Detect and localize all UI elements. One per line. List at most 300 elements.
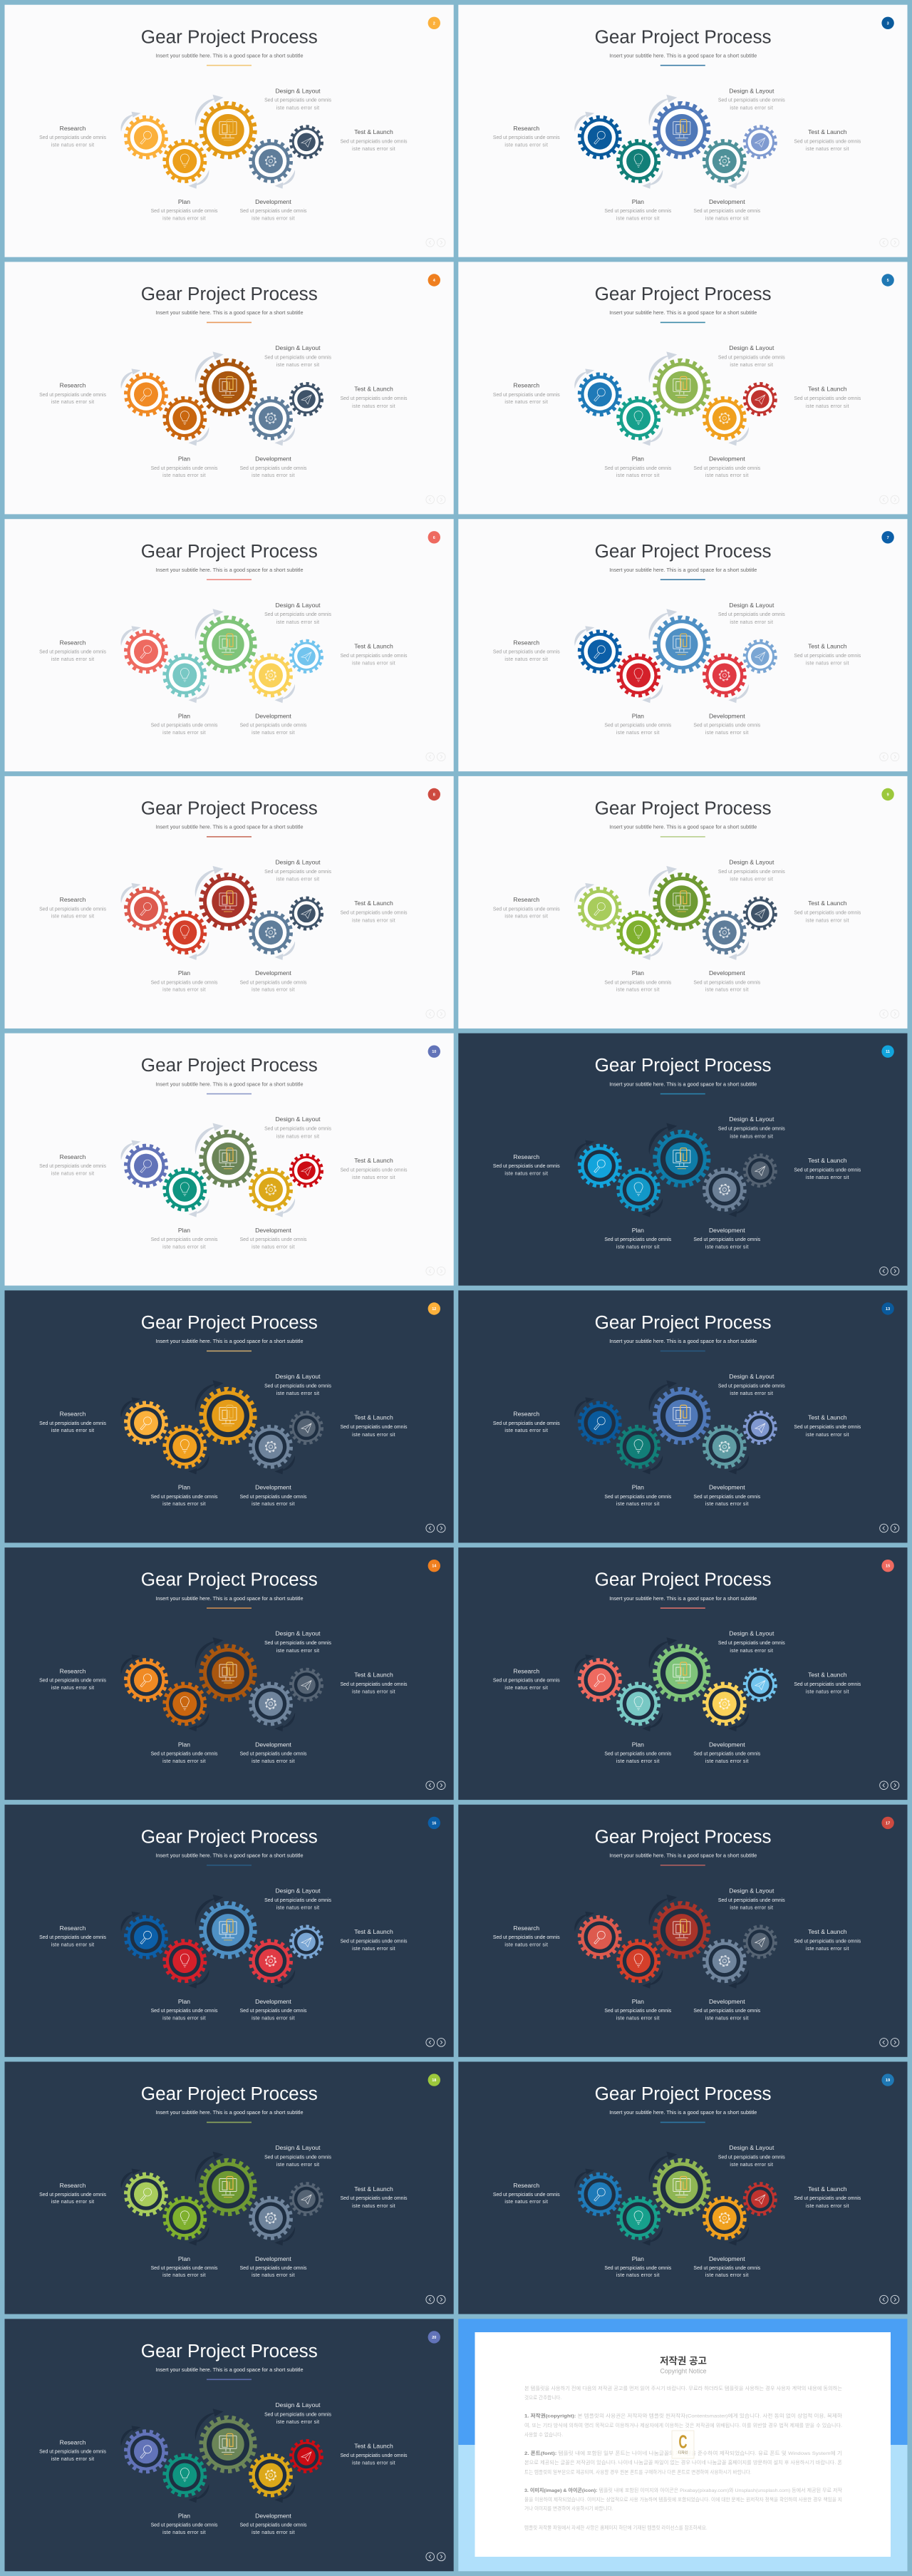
subtitle: Insert your subtitle here. This is a good space for a short subtitle [609, 2109, 757, 2116]
label: research: Sed ut perspiciatis unde omnis [493, 135, 560, 140]
gear: plan [165, 1941, 205, 1982]
title: Gear Project Process [595, 1569, 772, 1590]
gear: design [655, 1132, 708, 1185]
label: plan: Sed ut perspiciatis unde omnis [604, 1237, 672, 1242]
label: research: Research [513, 1925, 539, 1932]
gear: design [201, 1389, 255, 1443]
label: research: Research [513, 2182, 539, 2189]
title: Gear Project Process [141, 2083, 318, 2104]
title: Gear Project Process [595, 283, 772, 304]
label: test: iste natus error sit [806, 404, 849, 409]
label: development: Sed ut perspiciatis unde omnis [693, 209, 761, 214]
slide 9: light green [458, 776, 908, 1029]
nav buttons [880, 1524, 899, 1532]
gear: design [655, 361, 708, 414]
label: design: iste natus error sit [276, 1391, 319, 1396]
label: plan: Plan [632, 1741, 644, 1748]
arrows [120, 351, 295, 445]
label: test: Sed ut perspiciatis unde omnis [341, 1939, 408, 1944]
gear: design [201, 2160, 255, 2214]
gear: research [579, 374, 620, 415]
slide 20: dark indigo [4, 2319, 454, 2571]
gear: design [655, 103, 708, 157]
label: plan: Sed ut perspiciatis unde omnis [151, 1495, 218, 1500]
nav buttons [426, 2552, 445, 2561]
label: development: Sed ut perspiciatis unde omnis [693, 2009, 761, 2014]
label: research: iste natus error sit [51, 143, 94, 148]
arrows [120, 95, 295, 189]
label: test: Sed ut perspiciatis unde omnis [341, 2453, 408, 2458]
label: development: Sed ut perspiciatis unde omnis [240, 2266, 307, 2271]
label: research: Sed ut perspiciatis unde omnis [39, 2193, 106, 2198]
label: plan: iste natus error sit [616, 216, 660, 221]
label: development: Development [709, 198, 745, 205]
label: plan: iste natus error sit [162, 988, 206, 993]
page badge: 13 [886, 1307, 890, 1312]
label: design: Sed ut perspiciatis unde omnis [264, 2155, 331, 2160]
label: development: iste natus error sit [252, 1245, 295, 1250]
label: test: iste natus error sit [806, 147, 849, 152]
label: development: Development [255, 2255, 291, 2262]
label: test: Test & Launch [808, 1928, 847, 1935]
gear: design [201, 2418, 255, 2471]
label: plan: Sed ut perspiciatis unde omnis [151, 1752, 218, 1757]
label: research: Sed ut perspiciatis unde omnis [493, 1679, 560, 1684]
subtitle: Insert your subtitle here. This is a good space for a short subtitle [155, 1853, 304, 1859]
page badge [428, 2331, 440, 2344]
label: test: Test & Launch [354, 1157, 393, 1164]
label: design: Sed ut perspiciatis unde omnis [264, 870, 331, 875]
label: plan: Sed ut perspiciatis unde omnis [151, 2266, 218, 2271]
label: research: Research [60, 1925, 86, 1932]
label: test: Test & Launch [808, 1157, 847, 1164]
gear: research [579, 1145, 620, 1186]
label: design: Design & Layout [275, 602, 321, 609]
label: research: iste natus error sit [51, 1428, 94, 1433]
label: development: Sed ut perspiciatis unde omnis [240, 980, 307, 985]
label: test: Test & Launch [354, 643, 393, 650]
label: design: Sed ut perspiciatis unde omnis [264, 98, 331, 103]
label: plan: Plan [632, 1998, 644, 2005]
title rule [660, 1865, 705, 1866]
gear: development [704, 1426, 745, 1467]
label: development: Development [255, 1741, 291, 1748]
label: plan: iste natus error sit [616, 988, 660, 993]
nav buttons [426, 2295, 445, 2304]
label: development: Development [255, 1227, 291, 1234]
label: research: Sed ut perspiciatis unde omnis [39, 393, 106, 398]
arrows [120, 2151, 295, 2245]
label: development: Sed ut perspiciatis unde omnis [240, 466, 307, 471]
label: plan: Plan [632, 969, 644, 977]
label: plan: Plan [178, 1998, 190, 2005]
title rule [660, 322, 705, 323]
label: plan: iste natus error sit [616, 2273, 660, 2278]
gear: plan [618, 1169, 659, 1210]
copyright logo [672, 2431, 694, 2458]
gear: development [251, 912, 291, 953]
label: design: Design & Layout [729, 1887, 774, 1894]
label: design: iste natus error sit [276, 1906, 319, 1911]
label: research: Research [513, 125, 539, 132]
label: design: iste natus error sit [276, 620, 319, 625]
label: design: Design & Layout [275, 2144, 321, 2151]
label: design: Design & Layout [729, 1116, 774, 1123]
gear: plan [618, 2198, 659, 2238]
label: design: iste natus error sit [730, 1391, 773, 1396]
gear: test [291, 1669, 322, 1701]
label: test: iste natus error sit [352, 1433, 395, 1438]
gear: design [655, 875, 708, 928]
label: test: Test & Launch [808, 1671, 847, 1678]
copyright paragraph: font: 2. 폰트(font): 템플릿 내에 포함된 일부 폰트는 나이네 나눔글꼴의 저작권을 준수하여 제작되었습니다. 유료 폰트 및 Windows System에 기 [524, 2450, 842, 2456]
label: plan: Plan [178, 198, 190, 205]
gear: test [291, 1926, 322, 1957]
page badge: 18 [432, 2078, 436, 2083]
nav buttons [426, 1010, 445, 1018]
label: plan: iste natus error sit [162, 216, 206, 221]
gear: test [291, 2183, 322, 2215]
arrows [120, 609, 295, 703]
title: Gear Project Process [595, 540, 772, 562]
label: design: Design & Layout [729, 602, 774, 609]
label: design: Design & Layout [729, 2144, 774, 2151]
slide 15: dark pastel [458, 1547, 908, 1800]
subtitle: Insert your subtitle here. This is a good space for a short subtitle [609, 1595, 757, 1602]
subtitle: Insert your subtitle here. This is a good space for a short subtitle [155, 1081, 304, 1087]
label: research: Research [513, 896, 539, 903]
label: research: Research [60, 1667, 86, 1674]
label: test: Test & Launch [354, 128, 393, 135]
page badge [881, 788, 894, 800]
label: test: Test & Launch [808, 2185, 847, 2193]
label: research: iste natus error sit [51, 915, 94, 919]
gear: design [201, 875, 255, 928]
gear: plan [165, 141, 205, 181]
label: plan: iste natus error sit [616, 731, 660, 736]
title: Gear Project Process [595, 798, 772, 819]
gear: research [125, 117, 167, 158]
label: research: iste natus error sit [51, 400, 94, 405]
label: development: Sed ut perspiciatis unde omnis [693, 723, 761, 728]
subtitle: Insert your subtitle here. This is a good space for a short subtitle [155, 567, 304, 573]
label: plan: Plan [178, 1741, 190, 1748]
label: research: Sed ut perspiciatis unde omnis [493, 1421, 560, 1426]
label: research: Sed ut perspiciatis unde omnis [39, 1164, 106, 1169]
label: design: Design & Layout [275, 859, 321, 866]
gear: development [251, 2455, 291, 2495]
page badge: 9 [887, 793, 889, 798]
label: development: iste natus error sit [705, 1502, 749, 1507]
label: test: Test & Launch [354, 2443, 393, 2450]
label: development: Sed ut perspiciatis unde omnis [240, 1237, 307, 1242]
gear: development [704, 141, 745, 181]
gear: test [291, 126, 322, 158]
label: plan: iste natus error sit [162, 2016, 206, 2021]
label: development: Sed ut perspiciatis unde omnis [693, 1752, 761, 1757]
label: research: Research [60, 896, 86, 903]
label: plan: Sed ut perspiciatis unde omnis [151, 2009, 218, 2014]
label: development: Development [709, 969, 745, 977]
gear: plan [618, 141, 659, 181]
copyright paragraph: copyright: 여, 또는 기타 방식에 의하여 영리 목적으로 이용하거나 제삼자에게 이용하는 것은 저작권에 위배됩니다. 이를 위반할 경우 법적 제재를 받을 수 있습니다. [524, 2422, 842, 2428]
page badge: 15 [886, 1565, 890, 1569]
page badge: 5 [887, 279, 889, 283]
label: plan: iste natus error sit [162, 473, 206, 478]
label: development: iste natus error sit [705, 1245, 749, 1250]
label: plan: Plan [178, 455, 190, 463]
label: development: iste natus error sit [705, 988, 749, 993]
gear: design [201, 1647, 255, 1700]
gear: design [201, 1903, 255, 1957]
label: research: Sed ut perspiciatis unde omnis [493, 1935, 560, 1940]
title rule [207, 1607, 252, 1609]
page badge [428, 1045, 440, 1058]
gear: development [251, 655, 291, 696]
label: development: Sed ut perspiciatis unde omnis [240, 2009, 307, 2014]
label: plan: Sed ut perspiciatis unde omnis [151, 2523, 218, 2528]
label: design: iste natus error sit [730, 1906, 773, 1911]
label: test: Sed ut perspiciatis unde omnis [341, 139, 408, 144]
gear: development [704, 2198, 745, 2238]
copyright paragraph: image [524, 2487, 842, 2512]
label: plan: Sed ut perspiciatis unde omnis [604, 209, 672, 214]
gear: design [655, 618, 708, 671]
arrows [120, 1123, 295, 1217]
gear: research [579, 632, 620, 672]
label: design: iste natus error sit [730, 1134, 773, 1139]
label: design: Sed ut perspiciatis unde omnis [264, 1384, 331, 1389]
title: Gear Project Process [595, 2083, 772, 2104]
gear: research [125, 632, 167, 672]
label: plan: iste natus error sit [162, 2273, 206, 2278]
gear: development [704, 1941, 745, 1982]
subtitle: Insert your subtitle here. This is a good space for a short subtitle [609, 1853, 757, 1859]
label: development: Development [255, 455, 291, 463]
label: test: Sed ut perspiciatis unde omnis [341, 396, 408, 401]
label: plan: iste natus error sit [616, 1502, 660, 1507]
label: research: Sed ut perspiciatis unde omnis [39, 135, 106, 140]
label: development: Development [709, 2255, 745, 2262]
gear: design [201, 1132, 255, 1185]
gear: plan [165, 1684, 205, 1724]
gear: research [125, 2174, 167, 2215]
label: design: iste natus error sit [276, 363, 319, 368]
arrows [574, 1123, 749, 1217]
gear: plan [618, 1684, 659, 1724]
page badge [881, 274, 894, 287]
label: test: Sed ut perspiciatis unde omnis [341, 654, 408, 659]
title rule [207, 1865, 252, 1866]
copyright paragraph: image: 거나 이미지를 변경하여 사용하시기 바랍니다. [524, 2505, 613, 2512]
label: plan: Plan [178, 713, 190, 720]
gear: plan [618, 1426, 659, 1467]
label: test: iste natus error sit [352, 2204, 395, 2209]
title rule [207, 65, 252, 66]
label: design: Sed ut perspiciatis unde omnis [718, 870, 785, 875]
title rule [660, 2122, 705, 2123]
label: research: Sed ut perspiciatis unde omnis [39, 907, 106, 912]
label: plan: Sed ut perspiciatis unde omnis [604, 1495, 672, 1500]
label: research: Research [60, 1411, 86, 1418]
subtitle: Insert your subtitle here. This is a good space for a short subtitle [155, 1338, 304, 1344]
gear: development [704, 912, 745, 953]
page badge [428, 1302, 440, 1315]
label: development: Development [709, 1484, 745, 1491]
label: research: Research [513, 1667, 539, 1674]
label: research: Sed ut perspiciatis unde omnis [493, 650, 560, 655]
label: plan: Plan [178, 2513, 190, 2520]
arrows [120, 1380, 295, 1474]
title rule [207, 322, 252, 323]
label: design: iste natus error sit [276, 2420, 319, 2425]
title rule [660, 1607, 705, 1609]
gear: development [251, 1684, 291, 1724]
gear: test [291, 1155, 322, 1186]
gear: test [745, 383, 776, 415]
label: research: Sed ut perspiciatis unde omnis [493, 393, 560, 398]
arrows [574, 1895, 749, 1989]
page badge: 3 [887, 21, 889, 26]
gear: test [291, 1412, 322, 1443]
copyright paragraph: closing: 템플릿 저작물 파일에서 자세한 사항은 홈페이지 하단에 기재된 템플릿 라이선스를 참조하세요. [524, 2524, 708, 2530]
label: research: Sed ut perspiciatis unde omnis [39, 1679, 106, 1684]
slide 12: dark yellow [4, 1290, 454, 1542]
label: test: iste natus error sit [806, 2204, 849, 2209]
gear: design [655, 2160, 708, 2214]
label: development: iste natus error sit [705, 2273, 749, 2278]
gear: design [655, 1647, 708, 1700]
arrows [574, 1637, 749, 1731]
label: design: Sed ut perspiciatis unde omnis [718, 98, 785, 103]
nav buttons [880, 753, 899, 761]
title: Gear Project Process [141, 26, 318, 47]
copyright paragraph: intro [524, 2385, 842, 2401]
label: design: Design & Layout [729, 1630, 774, 1637]
title rule [207, 579, 252, 580]
title rule [207, 2379, 252, 2380]
label: design: Design & Layout [275, 1373, 321, 1380]
label: research: Sed ut perspiciatis unde omnis [39, 2450, 106, 2455]
label: development: Development [709, 455, 745, 463]
label: test: iste natus error sit [352, 918, 395, 923]
label: plan: Sed ut perspiciatis unde omnis [604, 2266, 672, 2271]
page badge [428, 1817, 440, 1829]
page badge [428, 531, 440, 543]
page badge [881, 531, 894, 543]
label: plan: Sed ut perspiciatis unde omnis [604, 1752, 672, 1757]
subtitle: Insert your subtitle here. This is a good space for a short subtitle [609, 1081, 757, 1087]
title: Gear Project Process [141, 2340, 318, 2361]
gear: research [579, 888, 620, 929]
label: development: iste natus error sit [252, 2530, 295, 2535]
copyright paragraph: copyright [524, 2412, 842, 2438]
label: development: Sed ut perspiciatis unde omnis [240, 209, 307, 214]
copyright paragraph: image: 물을 이용하여 제작되었습니다. 이미지는 상업적으로 사용 가능하며 템플릿에 포함되었습니다. 이에 대한 문제는 원저작자 정책을 확인하여 사용한 경우 책임을 지 [524, 2496, 842, 2503]
label: plan: Sed ut perspiciatis unde omnis [151, 466, 218, 471]
label: test: Test & Launch [808, 386, 847, 393]
label: test: Test & Launch [808, 900, 847, 907]
label: development: Sed ut perspiciatis unde omnis [693, 1495, 761, 1500]
slide 10: light indigo [4, 1034, 454, 1286]
slide 18: dark green [4, 2061, 454, 2314]
label: design: Design & Layout [275, 1887, 321, 1894]
label: plan: iste natus error sit [162, 1245, 206, 1250]
label: design: iste natus error sit [730, 105, 773, 110]
label: development: Development [255, 198, 291, 205]
label: design: iste natus error sit [730, 877, 773, 882]
gear: development [251, 2198, 291, 2238]
nav buttons [880, 2039, 899, 2046]
label: development: Development [709, 1998, 745, 2005]
gear: development [251, 141, 291, 181]
label: research: Research [60, 2182, 86, 2189]
label: plan: Sed ut perspiciatis unde omnis [151, 209, 218, 214]
title rule [207, 836, 252, 838]
gear: design [655, 1389, 708, 1443]
label: test: iste natus error sit [806, 1175, 849, 1180]
title: Gear Project Process [141, 1312, 318, 1333]
label: test: Sed ut perspiciatis unde omnis [341, 1168, 408, 1173]
copyright paragraph: copyright: 1. 저작권(copyright): 본 템플릿의 사용권은 저작자와 템플릿 원저작자(Contentsmaster)에게 있습니다. 사전 동의 없이 상업적 이용, 복제하 [524, 2412, 842, 2419]
nav buttons [880, 2295, 899, 2304]
label: test: Sed ut perspiciatis unde omnis [794, 654, 861, 659]
label: test: Test & Launch [808, 643, 847, 650]
copyright paragraph: intro: 것으로 간주합니다. [524, 2394, 561, 2401]
nav buttons [880, 1781, 899, 1789]
label: design: Sed ut perspiciatis unde omnis [718, 1641, 785, 1646]
label: plan: Sed ut perspiciatis unde omnis [604, 980, 672, 985]
gear: test [291, 898, 322, 929]
label: research: Research [60, 2439, 86, 2446]
page badge: 8 [433, 793, 435, 798]
page badge: 7 [887, 536, 889, 540]
label: design: Sed ut perspiciatis unde omnis [718, 2155, 785, 2160]
gear: test [745, 641, 776, 672]
gear: research [125, 374, 167, 415]
title: Gear Project Process [595, 1825, 772, 1847]
arrows [574, 351, 749, 445]
label: design: Design & Layout [729, 87, 774, 94]
page badge: 17 [886, 1821, 890, 1825]
label: test: iste natus error sit [352, 661, 395, 666]
subtitle: Insert your subtitle here. This is a good space for a short subtitle [155, 2366, 304, 2373]
gear: development [251, 398, 291, 438]
label: research: Research [513, 639, 539, 646]
label: test: Sed ut perspiciatis unde omnis [794, 139, 861, 144]
gear: design [201, 103, 255, 157]
label: research: Research [60, 382, 86, 389]
label: development: iste natus error sit [252, 988, 295, 993]
gear: research [125, 2431, 167, 2472]
label: design: Sed ut perspiciatis unde omnis [718, 1127, 785, 1132]
label: design: Sed ut perspiciatis unde omnis [264, 2412, 331, 2417]
label: design: Design & Layout [275, 2401, 321, 2408]
label: test: Test & Launch [354, 386, 393, 393]
label: design: Design & Layout [275, 1630, 321, 1637]
copyright logo: C [678, 2431, 688, 2452]
subtitle: Insert your subtitle here. This is a good space for a short subtitle [155, 309, 304, 316]
label: plan: Plan [632, 1484, 644, 1491]
gear: test [745, 1155, 776, 1186]
label: research: iste natus error sit [504, 2200, 548, 2205]
label: development: Sed ut perspiciatis unde omnis [693, 466, 761, 471]
label: plan: iste natus error sit [162, 2530, 206, 2535]
label: test: Test & Launch [354, 1671, 393, 1678]
slide 7: light blue red [458, 519, 908, 771]
label: development: Sed ut perspiciatis unde omnis [240, 1752, 307, 1757]
label: test: iste natus error sit [806, 1433, 849, 1438]
